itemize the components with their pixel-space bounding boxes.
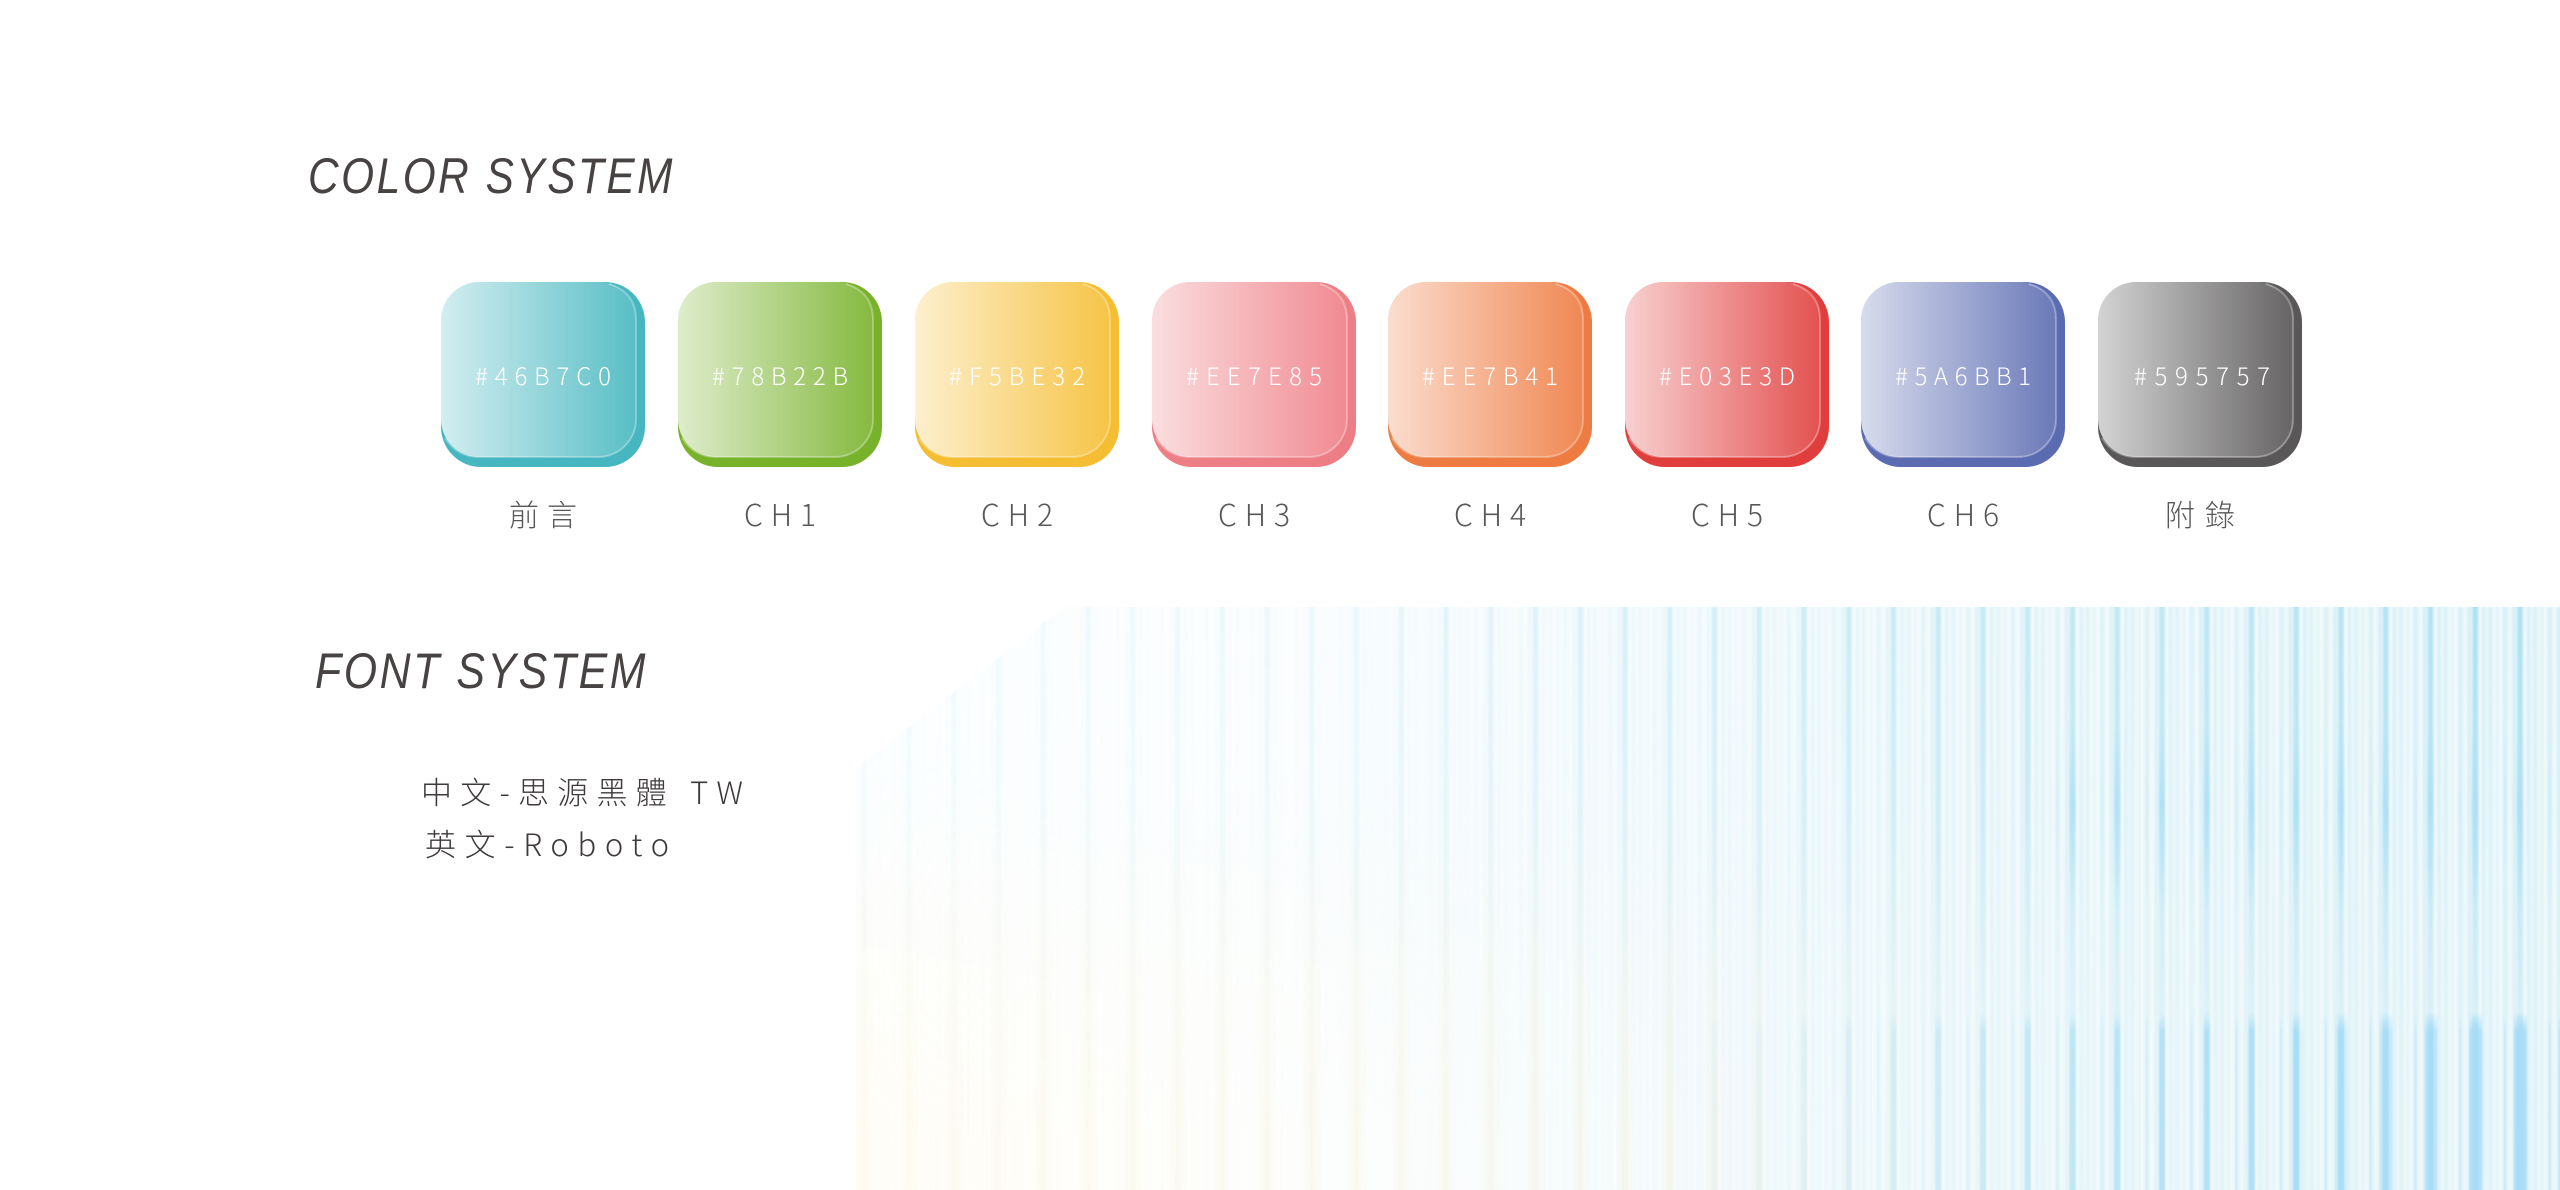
swatch: CH6 [1861, 282, 2065, 535]
swatch: CH4: #EE7B41 [1422, 357, 1558, 392]
swatch: CH3 [1152, 282, 1356, 535]
swatch: CH1: CH1 [744, 491, 816, 535]
swatch: CH2 [915, 282, 1119, 535]
swatch: 前言: #46B7C0 [475, 357, 611, 392]
swatch: CH1: #78B22B [712, 357, 848, 392]
swatch: CH1 [678, 282, 882, 535]
swatch: 附錄 [2098, 282, 2302, 535]
swatch: CH4: CH4 [1454, 491, 1526, 535]
swatch: 附錄: 附錄 [2165, 491, 2235, 535]
swatch: CH5: CH5 [1691, 491, 1763, 535]
swatch: 前言 [441, 282, 645, 535]
swatch: CH5: #E03E3D [1659, 357, 1795, 392]
swatch: CH2: #F5BE32 [949, 357, 1085, 392]
heading: font system: FONT SYSTEM [315, 643, 648, 699]
swatch: 附錄: #595757 [2134, 357, 2270, 392]
swatch: CH6: CH6 [1927, 491, 1999, 535]
swatch: 前言: 前言 [509, 491, 577, 535]
swatch: CH3: CH3 [1218, 491, 1290, 535]
swatch: CH2: CH2 [981, 491, 1053, 535]
text: english font: 英文-Roboto [425, 820, 669, 865]
swatch: CH6: #5A6BB1 [1895, 357, 2031, 392]
swatch: CH5 [1625, 282, 1829, 535]
swatch: CH3: #EE7E85 [1186, 357, 1322, 392]
heading: color system: COLOR SYSTEM [308, 148, 675, 204]
background: iridescent vertical stripe texture [856, 607, 2560, 1190]
text: chinese font: 中文-思源黑體 TW [421, 768, 743, 813]
swatch: CH4 [1388, 282, 1592, 535]
